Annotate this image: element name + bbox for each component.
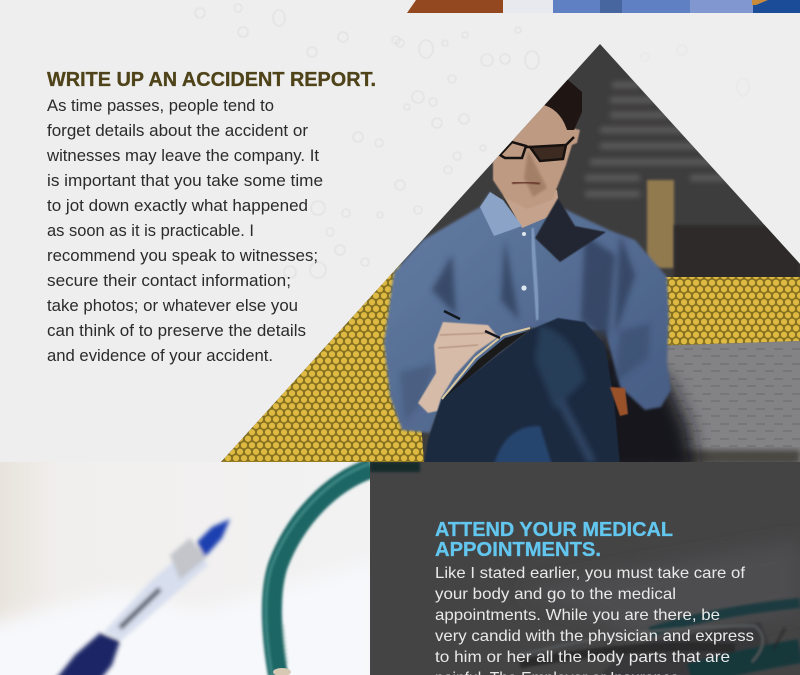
placket and buttons (532, 228, 538, 320)
face (492, 104, 580, 208)
text block: medical appointments: very candid with the physician and express (435, 628, 754, 645)
triangle photo: man writing on a sofa (220, 40, 800, 475)
shirt (384, 192, 671, 433)
top photo strip (407, 0, 800, 13)
text block: accident report: is important that you take some time (47, 171, 323, 190)
photo paper lighter wash (560, 548, 794, 629)
faint stethoscope in panel (520, 603, 800, 675)
mouth (512, 182, 540, 184)
glasses (500, 137, 574, 161)
icon: pen (55, 519, 230, 675)
pocket hand (610, 387, 628, 416)
jeans (424, 318, 620, 465)
dark backdrop (220, 40, 800, 465)
heading: write up an accident report: WRITE UP AN ACCIDENT REPORT. (47, 69, 376, 91)
notebook (442, 328, 530, 399)
text block: medical appointments: Like I stated earlier, you must take care of (435, 565, 746, 582)
panel: stethoscope photo left (0, 462, 380, 675)
text block: accident report (46, 96, 323, 365)
grey cushion (666, 341, 800, 462)
neck and collar (503, 190, 560, 228)
text block: accident report: take photos; or whatever else you (47, 296, 298, 315)
text block: accident report: witnesses may leave the company. It (46, 146, 319, 165)
heading: attend your medical appointments (435, 519, 673, 561)
text block: accident report: as soon as it is practicable. I (47, 221, 254, 240)
shadow beside hip (590, 340, 696, 475)
dark band under cushion (682, 447, 800, 462)
yellow sofa right (665, 277, 800, 346)
pen (444, 311, 500, 338)
text block: accident report: As time passes, people tend to (47, 96, 274, 115)
blurred paper lower area (0, 580, 368, 675)
background: paper with water drops (0, 0, 800, 463)
text block: medical appointments: appointments. While you are there, be (435, 607, 720, 624)
icon: stethoscope tube (266, 463, 372, 675)
text block: accident report: forget details about the accident or (47, 121, 308, 140)
text block: accident report: secure their contact information; (47, 271, 291, 290)
shirt shading (400, 235, 650, 422)
stethoscope metal fitting (273, 668, 291, 675)
yellow sofa left (221, 262, 424, 462)
text block: accident report: and evidence of your accident. (47, 346, 273, 365)
heading: attend your medical appointments: ATTEND YOUR MEDICAL (435, 519, 673, 541)
text block: accident report: recommend you speak to witnesses; (47, 246, 318, 265)
panel: attend medical appointments background (370, 462, 800, 675)
hair (544, 80, 582, 130)
text block: medical appointments (435, 565, 754, 675)
text block: medical appointments: your body and go to the medical (435, 586, 676, 603)
hand and wrist (418, 322, 498, 413)
text block: medical appointments: to him or her all the body parts that are (435, 649, 730, 666)
heading: attend your medical appointments: APPOINTMENTS. (435, 539, 601, 561)
text block: accident report: to jot down exactly what happened (47, 196, 308, 215)
text block: accident report: can think of to preserve the details (47, 321, 306, 340)
